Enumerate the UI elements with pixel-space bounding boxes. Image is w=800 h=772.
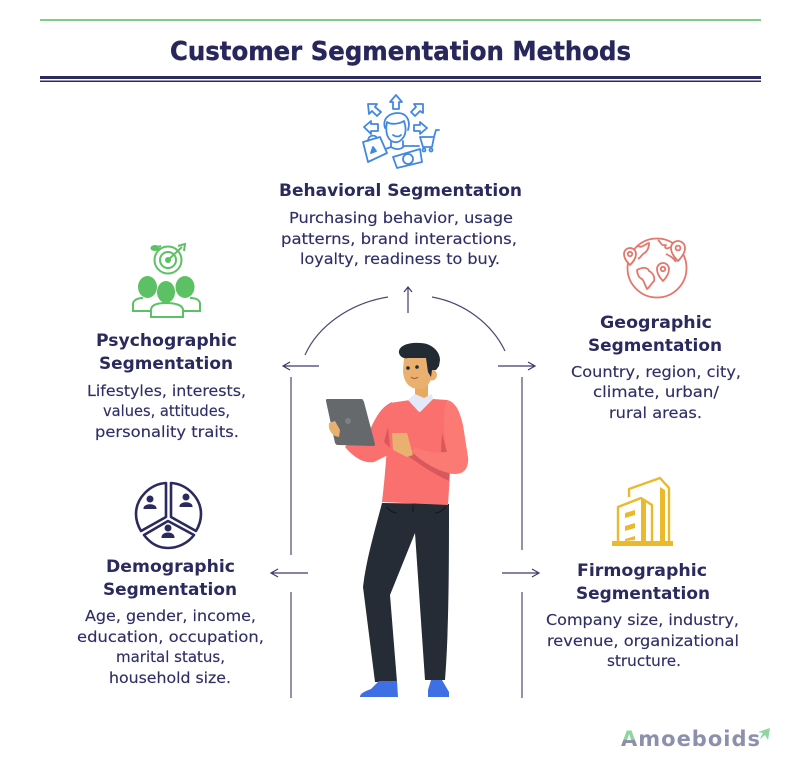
icon: pie of people [136,483,201,548]
viewer-left arm [345,402,392,462]
panel: behavioral [279,95,522,268]
icon: globe with pins [624,238,686,298]
heading: Firmographic [577,561,707,581]
panel: geographic [571,238,741,422]
neck [415,385,428,403]
description: personality traits. [95,423,239,441]
panel: demographic [77,483,264,687]
arrow: to firmographic [502,569,539,577]
description: Country, region, city, [571,363,741,381]
description: household size. [109,669,231,687]
heading: Behavioral Segmentation [279,181,522,201]
pockets [386,505,446,513]
description: Company size, industry, [546,611,739,629]
description: marital status, [116,648,225,666]
head [403,356,431,389]
description: values, attitudes, [103,402,230,420]
description: education, occupation, [77,628,264,646]
heading: Geographic [600,313,712,333]
description [77,607,264,687]
logo arrow [758,728,770,740]
connector arcs and lines [291,297,522,698]
arrow: up [404,287,412,313]
description: revenue, organizational [547,632,739,650]
description [281,209,517,268]
heading [103,557,237,600]
logo: Amoeboids: Amoeboids [621,727,760,751]
hair [399,343,440,377]
central figure: man with tablet [326,343,468,697]
heading: Segmentation [103,580,237,600]
description: Age, gender, income, [85,607,256,625]
heading [96,331,237,374]
panel: firmographic [546,478,739,670]
header [40,19,761,82]
collar [408,394,433,412]
face details [406,365,419,378]
description: loyalty, readiness to buy. [300,250,500,268]
panel: psychographic [87,244,246,441]
icon: behavioral customer [363,95,439,168]
description: rural areas. [609,404,702,422]
trousers [363,503,449,682]
description: Lifestyles, interests, [87,382,246,400]
heading: Demographic [106,557,235,577]
viewer-right arm [410,400,468,474]
heading: Psychographic [96,331,237,351]
arrow: to geographic [498,362,535,370]
icon: buildings [612,478,673,546]
heading: Segmentation [99,354,233,374]
icon: target and people [133,244,200,317]
ear [427,370,437,380]
arrow: to demographic [271,569,308,577]
title: Customer Segmentation Methods [170,37,631,67]
description: structure. [607,652,681,670]
description: patterns, brand interactions, [281,230,517,248]
description [87,382,246,441]
arrow: to psychographic [283,362,319,370]
description: Purchasing behavior, usage [289,209,513,227]
hands [329,421,413,457]
shoes [360,680,449,697]
arm shadow [384,427,390,448]
description [571,363,741,422]
heading: Segmentation [588,336,722,356]
heading [576,561,710,604]
tablet [326,399,375,446]
description: climate, urban/ [593,383,720,401]
sweater torso [382,399,456,505]
heading: Segmentation [576,584,710,604]
heading [588,313,722,356]
description [546,611,739,670]
